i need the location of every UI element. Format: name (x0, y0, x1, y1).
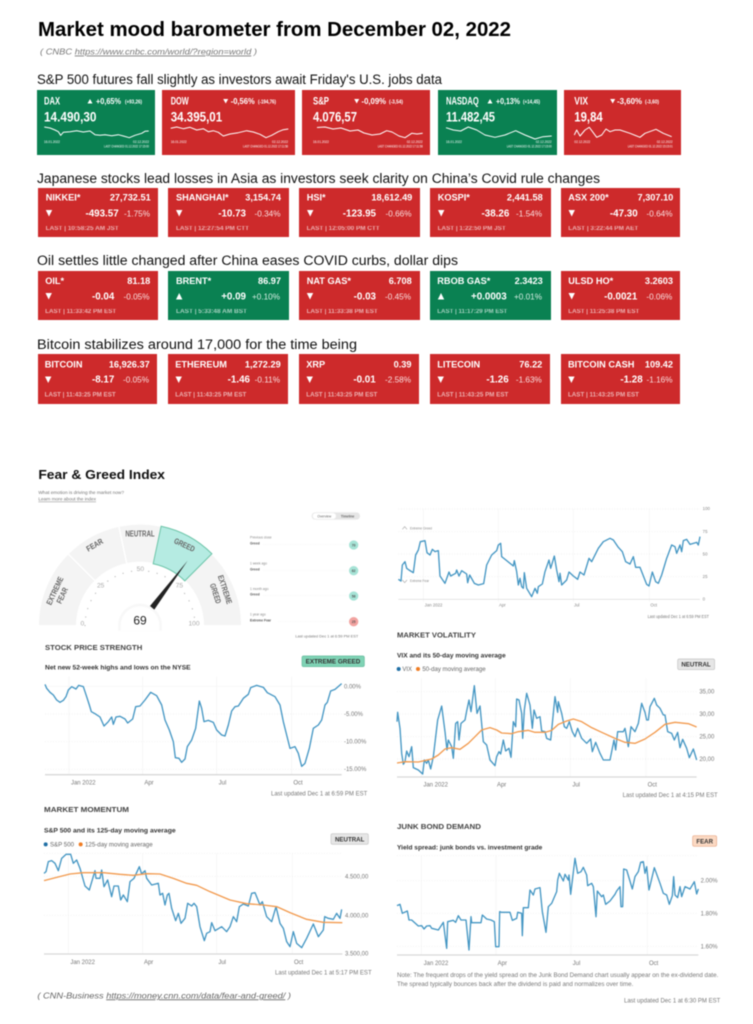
card: Bitcoin Cash: 109.42 (645, 359, 673, 369)
line chart (44, 853, 369, 966)
card: Ethereum: -1.46 (228, 374, 251, 386)
row: commodity cards (38, 271, 680, 320)
card: KOSPI (430, 188, 551, 237)
card: NASDAQ: 11.482,45 (446, 109, 495, 125)
historical readings list: 70 (352, 543, 356, 547)
historical readings list: 1 year ago (250, 613, 266, 617)
card: VIX: 02.12.2022 (657, 140, 673, 144)
card: ASX 200: -47.30 (610, 208, 638, 220)
card: ASX 200: 7,307.10 (638, 193, 673, 203)
card: S&P: -0,09% (362, 97, 386, 106)
line chart: Apr (144, 960, 153, 966)
card: DAX: 16.01.2022 (44, 140, 60, 144)
card: ASX 200 (561, 188, 680, 237)
card: Litecoin: -1.26 (486, 374, 509, 386)
card: Litecoin (430, 354, 550, 404)
historical readings list: Greed (250, 567, 260, 571)
line chart: 0.00% (344, 684, 362, 690)
legend: VIX (402, 667, 412, 673)
line chart: Jan 2022 (424, 961, 449, 967)
chart: fear and greed timeline: Jul (574, 602, 580, 607)
card: XRP: XRP (306, 359, 325, 369)
timeline toggle (312, 512, 360, 520)
card: DOW: 02.12.2022 (272, 140, 288, 144)
card: Shanghai: SHANGHAI* (176, 193, 229, 203)
card: RBOB Gas: RBOB GAS* (437, 276, 491, 286)
line chart: Jan 2022 (71, 781, 96, 787)
card: ULSD HO: -0.06% (646, 292, 672, 302)
line chart: Jul (219, 781, 226, 787)
card: RBOB Gas (430, 271, 551, 320)
card: Oil: -0.05% (124, 292, 150, 302)
row: index cards with sparklines (37, 90, 681, 155)
heading: bitcoin: Bitcoin stabilizes around 17,000 for the time being (37, 337, 357, 353)
card: Brent: +0.10% (252, 292, 280, 302)
card: DAX (37, 90, 155, 155)
chart: fear and greed timeline: 100 (703, 506, 710, 511)
card: KOSPI: -38.26 (482, 208, 510, 220)
card: ULSD HO: -0.0021 (604, 292, 638, 302)
card: VIX: VIX (574, 96, 589, 108)
card: DAX: 14.490,30 (44, 109, 97, 125)
historical readings list: 58 (352, 594, 356, 598)
gauge: 50 (137, 566, 144, 573)
chart note: The spread typically bounces back after the dividend is paid and normalizes over time. (397, 982, 634, 988)
chart: fear and greed timeline: Last updated Dec 1 at 6:59 PM EST (648, 614, 709, 619)
gauge: FEAR (85, 537, 105, 554)
line chart: Jan 2022 (70, 960, 96, 966)
gauge: 25 (97, 582, 105, 589)
card: Nikkei: NIKKEI* (46, 193, 81, 203)
card: Bitcoin Cash: -1.28 (620, 374, 643, 386)
line chart (397, 678, 715, 789)
card: ULSD HO: LAST | 11:25:38 PM EST (568, 309, 640, 315)
chart: fear and greed timeline: Jan 2022 (425, 602, 443, 607)
heading: oil: Oil settles little changed after China eases COVID curbs, dollar dips (37, 253, 458, 269)
gauge: EXTREME (45, 575, 66, 606)
card: NASDAQ (438, 90, 557, 155)
historical readings list: 62 (352, 569, 356, 573)
card: HSI: -123.95 (343, 208, 377, 220)
line chart: Jul (573, 961, 580, 967)
card: Oil: 81.18 (127, 276, 150, 286)
card: Bitcoin (38, 354, 157, 404)
last updated: Last updated Dec 1 at 5:17 PM EST (275, 971, 372, 977)
subtitle: S&P 500 and its 125-day moving average (44, 827, 176, 834)
gauge: 75 (176, 582, 183, 589)
card: Nat Gas: -0.45% (385, 292, 411, 302)
legend: 50-day moving average (422, 667, 486, 673)
title: Market mood barometer from December 02, 2022 (38, 19, 511, 41)
line chart: Oct (648, 783, 657, 789)
line chart: Jul (218, 960, 226, 966)
panel: market momentum (37, 805, 372, 1000)
subtitle: Yield spread: junk bonds vs. investment grade (397, 844, 543, 851)
line chart: Jan 2022 (423, 783, 449, 789)
card: VIX: LAST CHANGED 01.12.2022 15:15:01 (628, 144, 673, 148)
card: S&P: S&P (313, 96, 329, 108)
row: crypto cards (38, 354, 680, 404)
last updated: Last updated Dec 1 at 6:59 PM EST (271, 791, 368, 797)
card: Shanghai: 3,154.74 (245, 193, 282, 203)
card: Nikkei: -493.57 (85, 208, 119, 220)
historical readings list: 1 month ago (250, 587, 269, 591)
line chart: 30,00 (699, 712, 715, 718)
gauge: GREED (208, 582, 223, 605)
badge: neutral: NEUTRAL (681, 662, 711, 669)
historical readings list: 1 week ago (250, 562, 267, 566)
card: KOSPI: LAST | 1:22:50 PM JST (438, 226, 506, 232)
card: DOW: -0,56% (231, 97, 255, 106)
intro text: Learn more about the index (38, 497, 97, 502)
historical readings list: Greed (250, 593, 260, 597)
card: Nat Gas: 6.708 (389, 276, 412, 286)
line chart: -5.00% (344, 712, 364, 718)
chart: fear and greed timeline: 75 (703, 529, 708, 534)
card: Shanghai (168, 188, 289, 237)
legend (44, 842, 153, 848)
card: Bitcoin: 16,926.37 (109, 359, 150, 369)
line chart: Apr (498, 961, 507, 967)
card: Bitcoin: BITCOIN (45, 359, 83, 369)
legend: 125-day moving average (85, 842, 153, 848)
line chart (397, 856, 718, 967)
chart: fear and greed timeline: 0 (703, 597, 706, 602)
badge: fear (693, 836, 717, 846)
card: Bitcoin: -0.05% (123, 376, 149, 384)
card: Bitcoin Cash: BITCOIN CASH (568, 359, 635, 369)
card: XRP: -0.01 (353, 374, 376, 386)
chart: fear and greed timeline: 25 (703, 574, 708, 579)
badge: neutral (678, 659, 715, 670)
line chart: Oct (649, 961, 659, 967)
chart note: Note: The frequent drops of the yield spread on the Junk Bond Demand chart usually appear on the ex-dividend date. (397, 973, 719, 979)
source: CNN: ( CNN-Business https://money.cnn.com/data/fear-and-greed/ ) (37, 990, 291, 1000)
card: Brent: LAST | 5:33:48 AM BST (176, 309, 247, 315)
card: Nat Gas: LAST | 11:33:38 PM EST (307, 309, 378, 315)
gauge: 0 (80, 620, 84, 627)
line chart: 1.80% (701, 911, 718, 917)
line chart: Apr (144, 781, 154, 787)
intro text: What emotion is driving the market now? (38, 490, 125, 495)
card: Brent: 86.97 (258, 276, 281, 286)
card: ASX 200: -0.64% (647, 210, 672, 218)
card: Nikkei (38, 188, 158, 237)
card: Bitcoin Cash: -1.16% (647, 376, 672, 384)
card: KOSPI: 2,441.58 (507, 193, 543, 203)
historical readings list: Extreme Fear (250, 619, 272, 623)
card: Bitcoin Cash (561, 354, 680, 404)
card: NASDAQ: (+14,45) (523, 100, 540, 106)
card: DOW: LAST CHANGED 01.12.2022 17:11:58 (243, 144, 288, 148)
card: DAX: LAST CHANGED 01.12.2022 17:15:00 (104, 144, 149, 148)
card: NASDAQ: 16.01.2022 (446, 140, 462, 144)
last updated: Last updated Dec 1 at 6:30 PM EST (624, 998, 721, 1004)
heading: JUNK BOND DEMAND (397, 822, 481, 831)
card: DAX: (+93,26) (125, 100, 142, 106)
badge: neutral (331, 834, 368, 844)
card: DOW: 34.395,01 (171, 109, 222, 125)
card: Litecoin: LAST | 11:43:25 PM EST (437, 392, 509, 398)
card: RBOB Gas: LAST | 11:17:29 PM EST (437, 309, 508, 315)
card: ULSD HO (561, 271, 680, 320)
chart: fear and greed timeline: Oct (650, 602, 658, 607)
card: Litecoin: LITECOIN (437, 359, 481, 369)
card: NASDAQ: 02.12.2022 (536, 140, 552, 144)
card: Oil: LAST | 11:33:42 PM EST (45, 309, 117, 315)
card: Nat Gas (299, 271, 420, 320)
gauge: GREED (173, 536, 196, 554)
panel: stock price strength (45, 643, 368, 797)
heading: Fear & Greed Index: Fear & Greed Index (38, 467, 166, 482)
historical readings list: Greed (250, 542, 260, 546)
chart: fear and greed timeline: Apr (499, 602, 506, 607)
panel: junk bond demand (397, 822, 721, 1004)
timeline toggle: Overview (317, 514, 332, 518)
line chart: 25,00 (699, 735, 715, 741)
chart: fear and greed timeline: Extreme Fear (410, 578, 430, 583)
intro text (38, 490, 125, 502)
card: XRP: LAST | 11:43:25 PM EST (306, 392, 378, 398)
card: Litecoin: 76.22 (519, 359, 542, 369)
line chart: 4.000,00 (345, 913, 369, 919)
badge: fear: FEAR (696, 838, 713, 845)
card: Brent: +0.09 (221, 292, 247, 302)
historical readings list: 25 (352, 620, 356, 624)
card: VIX: 19,84 (574, 109, 603, 125)
card: RBOB Gas: +0.0003 (471, 292, 507, 302)
card: KOSPI: KOSPI* (438, 193, 470, 203)
card: Ethereum: LAST | 11:43:25 PM EST (175, 392, 247, 398)
card: ASX 200: LAST | 3:22:44 PM AET (568, 226, 639, 232)
card: HSI (299, 188, 420, 237)
card: NASDAQ: NASDAQ (446, 96, 479, 108)
gauge: 100 (188, 620, 200, 627)
card: S&P: LAST CHANGED 01.12.2022 17:11:58 (378, 144, 423, 148)
heading: Asia: Japanese stocks lead losses in Asia as investors seek clarity on China’s Covid rule changes (37, 171, 600, 187)
card: Shanghai: -0.34% (255, 210, 280, 218)
card: Ethereum (168, 354, 288, 404)
card: DAX: DAX (44, 96, 60, 108)
card: Shanghai: -10.73 (218, 208, 247, 220)
badge: neutral: NEUTRAL (335, 836, 364, 843)
card: Oil: -0.04 (92, 292, 115, 302)
panel: market volatility (397, 631, 718, 799)
gauge (38, 524, 242, 631)
card: Shanghai: LAST | 12:27:54 PM CTT (176, 226, 249, 232)
line chart: 35,00 (699, 690, 715, 696)
card: Litecoin: -1.63% (516, 376, 542, 384)
line chart: Apr (497, 783, 506, 789)
chart note (397, 973, 719, 988)
line chart: 4.500,00 (345, 874, 369, 880)
card: S&P (302, 90, 430, 155)
line chart (45, 677, 367, 787)
card: Nikkei: -1.75% (124, 210, 150, 218)
heading: futures: S&P 500 futures fall slightly as investors await Friday's U.S. jobs data (37, 72, 442, 88)
card: Bitcoin Cash: LAST | 11:43:25 PM EST (568, 392, 639, 398)
line chart: -10.00% (344, 739, 367, 745)
card: Bitcoin: LAST | 11:43:25 PM EST (45, 392, 116, 398)
last updated: Last updated Dec 1 at 4:15 PM EST (623, 793, 718, 799)
line chart: 20,00 (699, 757, 715, 763)
card: Bitcoin: -8.17 (92, 374, 115, 386)
chart: fear and greed timeline: Extreme Greed (410, 526, 432, 531)
card: HSI: 18,612.49 (371, 193, 412, 203)
card: Nikkei: LAST | 10:58:25 AM JST (46, 226, 119, 232)
card: HSI: -0.66% (386, 210, 412, 218)
badge: extreme greed (302, 656, 364, 667)
card: NASDAQ: +0,13% (496, 97, 520, 106)
subtitle: Net new 52-week highs and lows on the NYSE (45, 664, 191, 671)
legend: S&P 500 (50, 842, 75, 848)
row: Asia index cards (38, 188, 680, 237)
card: S&P: 4.076,57 (313, 109, 357, 125)
heading: MARKET VOLATILITY (397, 631, 476, 640)
card: Nikkei: 27,732.51 (110, 193, 151, 203)
card: XRP (299, 354, 419, 404)
line chart: Jul (572, 783, 580, 789)
card: ULSD HO: ULSD HO* (568, 276, 614, 286)
card: Brent: BRENT* (176, 276, 212, 286)
legend (397, 667, 486, 673)
card: Nat Gas: NAT GAS* (307, 276, 351, 286)
card: Oil (38, 271, 158, 320)
card: DOW: DOW (171, 96, 189, 108)
line chart: -15.00% (344, 767, 367, 773)
card: DOW: 16.01.2022 (171, 140, 187, 144)
card: Ethereum: ETHEREUM (175, 359, 227, 369)
historical readings list (250, 536, 358, 626)
last updated: Last updated Dec 1 at 6:59 PM EST (295, 634, 358, 638)
card: S&P: 02.12.2022 (407, 140, 423, 144)
card: Brent (168, 271, 289, 320)
heading: STOCK PRICE STRENGTH (45, 643, 142, 652)
card: DAX: +0,65% (96, 97, 121, 106)
card: RBOB Gas: +0.01% (514, 292, 542, 302)
gauge: 69 (133, 613, 147, 627)
gauge: EXTREME (216, 574, 234, 606)
card: XRP: -2.58% (385, 376, 411, 384)
card: VIX (564, 90, 681, 155)
badge: extreme greed: EXTREME GREED (306, 659, 361, 666)
card: Oil: OIL* (45, 276, 65, 286)
card: XRP: 0.39 (394, 359, 412, 369)
card: ASX 200: ASX 200* (568, 193, 609, 203)
card: Nat Gas: -0.03 (354, 292, 377, 302)
card: HSI: HSI* (307, 193, 326, 203)
line chart: 2.00% (701, 879, 718, 885)
card: HSI: LAST | 12:05:00 PM CTT (307, 226, 380, 232)
subtitle: VIX and its 50-day moving average (397, 652, 506, 659)
card: S&P: 16.01.2022 (313, 140, 329, 144)
line chart: 3.500,00 (345, 952, 369, 958)
card: Ethereum: 1,272.29 (245, 359, 281, 369)
card: DAX: 02.12.2022 (133, 140, 149, 144)
card: S&P: (-3,54) (389, 100, 403, 106)
panel: Fear & Greed gauge (38, 467, 360, 638)
card: Ethereum: -0.11% (255, 376, 280, 384)
card: VIX: -3,60% (617, 97, 642, 106)
line chart: Oct (294, 960, 304, 966)
card: VIX: (-3,60) (645, 100, 659, 106)
card: DOW: (-194,76) (258, 100, 276, 106)
chart: fear and greed timeline: 50 (703, 551, 708, 556)
card: VIX: 02.12.2022 (574, 140, 590, 144)
card: KOSPI: -1.54% (516, 210, 542, 218)
heading: MARKET MOMENTUM (44, 805, 129, 814)
timeline toggle: Timeline (341, 514, 355, 518)
line chart: 1.60% (701, 944, 718, 950)
card: ULSD HO: 3.2603 (645, 276, 673, 286)
gauge: NEUTRAL (125, 530, 155, 539)
chart: fear and greed timeline (398, 506, 710, 619)
card: RBOB Gas: 2.3423 (515, 276, 543, 286)
card: NASDAQ: LAST CHANGED 01.12.2022 17:15:00 (507, 144, 552, 148)
source: CNBC: ( CNBC https://www.cnbc.com/world/?region=world ) (40, 46, 257, 56)
historical readings list: Previous close (250, 536, 272, 540)
gauge: FEAR (55, 586, 70, 605)
card: DOW (162, 90, 295, 155)
line chart: Oct (293, 781, 303, 787)
